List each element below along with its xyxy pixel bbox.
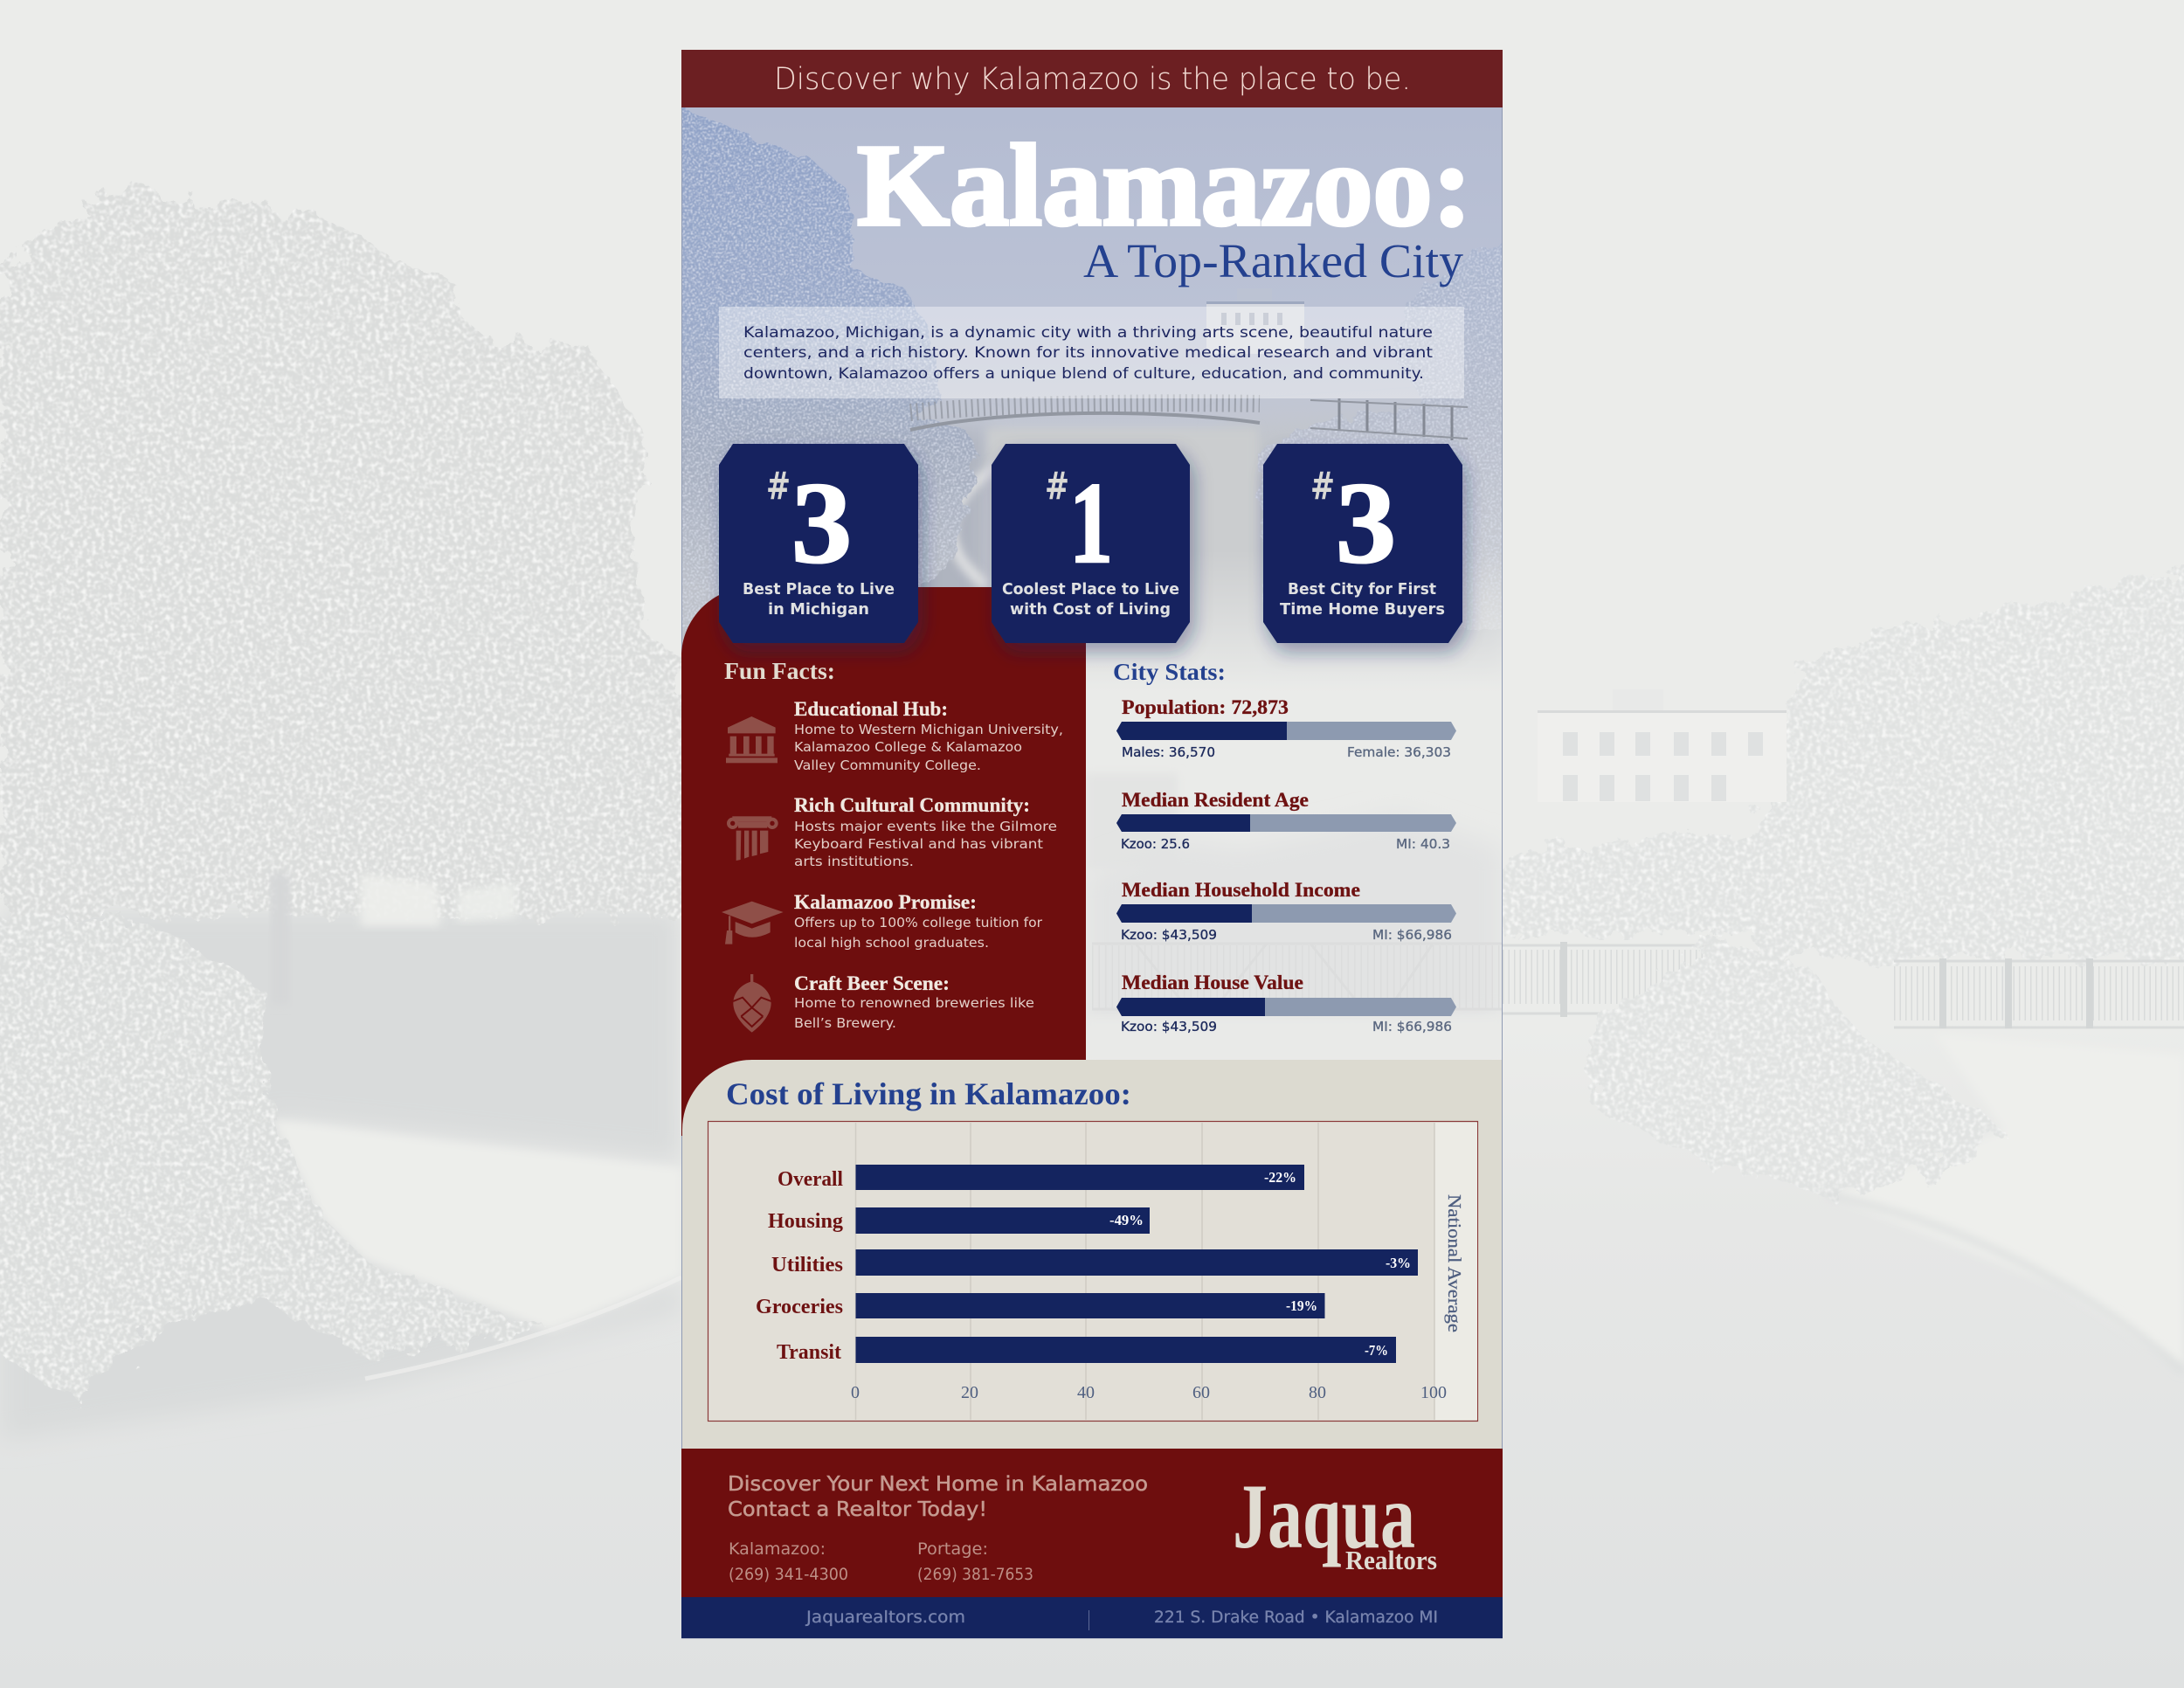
bar: transit: Transit [777, 1341, 841, 1364]
fact: educational hub: Kalamazoo College & Kalamazoo [794, 739, 1022, 755]
stat: population: Population: 72,873 [1122, 696, 1289, 718]
fact: rich cultural community: Rich Cultural Community: [794, 794, 1030, 816]
bar: utilities: Utilities [771, 1254, 843, 1276]
contact: portage office: Portage: [917, 1539, 988, 1559]
fact: educational hub: Home to Western Michigan University, [794, 722, 1063, 737]
logo: jaqua realtors: Jaqua [1233, 1465, 1415, 1567]
call to action: Contact a Realtor Today! [728, 1498, 987, 1521]
bar: groceries: -19% [1286, 1297, 1317, 1314]
bar: overall: -22% [1264, 1169, 1296, 1186]
icon: hop cone [733, 974, 771, 1033]
x axis labels: 0 [851, 1383, 860, 1402]
x axis labels: 40 [1077, 1383, 1095, 1402]
contact: portage office: (269) 381-7653 [917, 1565, 1033, 1584]
footer: website and address bar: 221 S. Drake Road • Kalamazoo MI [1154, 1608, 1438, 1627]
bar: housing [768, 1207, 1150, 1234]
intro text block [719, 307, 1464, 398]
intro text block: centers, and a rich history. Known for its innovative medical research and vibrant [743, 344, 1434, 361]
label: national average: National Average [1444, 1194, 1465, 1332]
fact: kalamazoo promise: local high school graduates. [794, 935, 989, 951]
badge: #3 best city for first time home buyers: Time Home Buyers [1280, 600, 1445, 619]
call to action: Discover Your Next Home in Kalamazoo [728, 1473, 1148, 1496]
stat: median household income: MI: $66,986 [1372, 927, 1452, 943]
x axis labels: 80 [1309, 1383, 1326, 1402]
stat: population: Female: 36,303 [1347, 744, 1451, 760]
panel: fun facts [681, 587, 1086, 1136]
bar chart: cost of living vs national average [708, 1122, 1478, 1421]
fact: educational hub [794, 698, 1063, 773]
stat: median house value: Kzoo: $43,509 [1121, 1019, 1217, 1034]
stat: median household income [1116, 879, 1456, 943]
fact: kalamazoo promise: Kalamazoo Promise: [794, 891, 977, 913]
fact: rich cultural community: Hosts major events like the Gilmore [794, 819, 1057, 834]
stat: median resident age: Kzoo: 25.6 [1121, 836, 1190, 852]
stat: median household income: Kzoo: $43,509 [1121, 927, 1217, 943]
fact: educational hub: Educational Hub: [794, 698, 948, 720]
fact: craft beer scene: Bell’s Brewery. [794, 1015, 896, 1031]
header banner [681, 50, 1503, 107]
fact: kalamazoo promise: Offers up to 100% college tuition for [794, 915, 1043, 930]
intro text block: Kalamazoo, Michigan, is a dynamic city with a thriving arts scene, beautiful nature [743, 324, 1433, 341]
fact: rich cultural community [794, 794, 1057, 869]
badge: #1 coolest place to live: with Cost of Living [1010, 600, 1171, 619]
contact: kalamazoo office: Kalamazoo: [729, 1539, 826, 1559]
x axis labels: 100 [1420, 1383, 1447, 1402]
x axis labels: 20 [961, 1383, 978, 1402]
badge: #3 best city for first time home buyers: 3 [1336, 458, 1396, 587]
intro text block: downtown, Kalamazoo offers a unique blend of culture, education, and community. [743, 365, 1424, 382]
fact: craft beer scene: Home to renowned breweries like [794, 995, 1034, 1011]
title: A Top-Ranked City [1083, 234, 1463, 287]
stat: population: Males: 36,570 [1122, 744, 1215, 760]
icon: graduation cap [722, 902, 784, 944]
footer: website and address bar [681, 1597, 1503, 1638]
contact: kalamazoo office [729, 1539, 848, 1584]
contact: kalamazoo office: (269) 341-4300 [729, 1565, 848, 1584]
badge: #3 best place to live [719, 444, 918, 643]
bar: transit [777, 1337, 1396, 1364]
fact: craft beer scene: Craft Beer Scene: [794, 972, 950, 994]
call to action [728, 1473, 1148, 1521]
badge: #3 best city for first time home buyers [1263, 444, 1462, 643]
badge: #3 best city for first time home buyers: # [1310, 464, 1335, 508]
fact: craft beer scene [794, 972, 1034, 1031]
heading: fun facts: Fun Facts: [724, 658, 835, 684]
icon: university building [726, 716, 778, 763]
footer: website and address bar: Jaquarealtors.com [805, 1608, 965, 1627]
badge: #1 coolest place to live: 1 [1069, 458, 1113, 587]
contact: portage office [917, 1539, 1033, 1584]
bar: overall: Overall [778, 1168, 843, 1191]
panel: city stats [1113, 659, 1456, 1034]
fact: educational hub: Valley Community College. [794, 758, 981, 773]
fact: rich cultural community: arts institutions. [794, 854, 914, 869]
stat: median resident age: MI: 40.3 [1396, 836, 1450, 852]
footer: contact panel [681, 1449, 1503, 1597]
badge: #1 coolest place to live [992, 444, 1190, 643]
stat: median house value [1116, 972, 1456, 1034]
badge: #3 best place to live: 3 [791, 458, 852, 587]
bar: overall [778, 1165, 1304, 1191]
stat: median house value: MI: $66,986 [1372, 1019, 1452, 1034]
stat: population [1116, 696, 1456, 760]
badge: #1 coolest place to live: Coolest Place to Live [1002, 580, 1179, 598]
bar: housing: Housing [768, 1210, 843, 1233]
logo: jaqua realtors: Realtors [1345, 1545, 1437, 1575]
bar: utilities [771, 1249, 1418, 1276]
stat: median household income: Median Household Income [1122, 879, 1360, 901]
bar: groceries [756, 1293, 1324, 1318]
header banner: Discover why Kalamazoo is the place to be. [774, 62, 1411, 97]
badge: #3 best place to live: # [766, 464, 791, 508]
title: Kalamazoo: [857, 121, 1472, 250]
stat: median resident age [1116, 789, 1456, 852]
stat: median house value: Median House Value [1122, 972, 1303, 993]
bar: transit: -7% [1365, 1342, 1388, 1359]
badge: #3 best place to live: Best Place to Live [743, 580, 895, 598]
x axis labels: 60 [1192, 1383, 1210, 1402]
heading: cost of living: Cost of Living in Kalamazoo: [726, 1076, 1131, 1111]
panel: cost of living [682, 1060, 1502, 1449]
panel: photo hero background [673, 100, 1511, 1060]
bar: groceries: Groceries [756, 1296, 843, 1318]
badge: #3 best place to live: in Michigan [768, 600, 869, 619]
fact: rich cultural community: Keyboard Festival and has vibrant [794, 836, 1043, 852]
x axis labels [851, 1383, 1447, 1402]
icon: column [727, 816, 778, 861]
bar: housing: -49% [1109, 1212, 1144, 1228]
fact: kalamazoo promise [794, 891, 1043, 951]
panel edge lines [681, 50, 1503, 1638]
bar: utilities: -3% [1386, 1255, 1411, 1271]
heading: city stats: City Stats: [1113, 659, 1226, 685]
badge: #1 coolest place to live: # [1045, 464, 1069, 508]
badge: #3 best city for first time home buyers: Best City for First [1288, 580, 1436, 598]
stat: median resident age: Median Resident Age [1122, 789, 1309, 811]
